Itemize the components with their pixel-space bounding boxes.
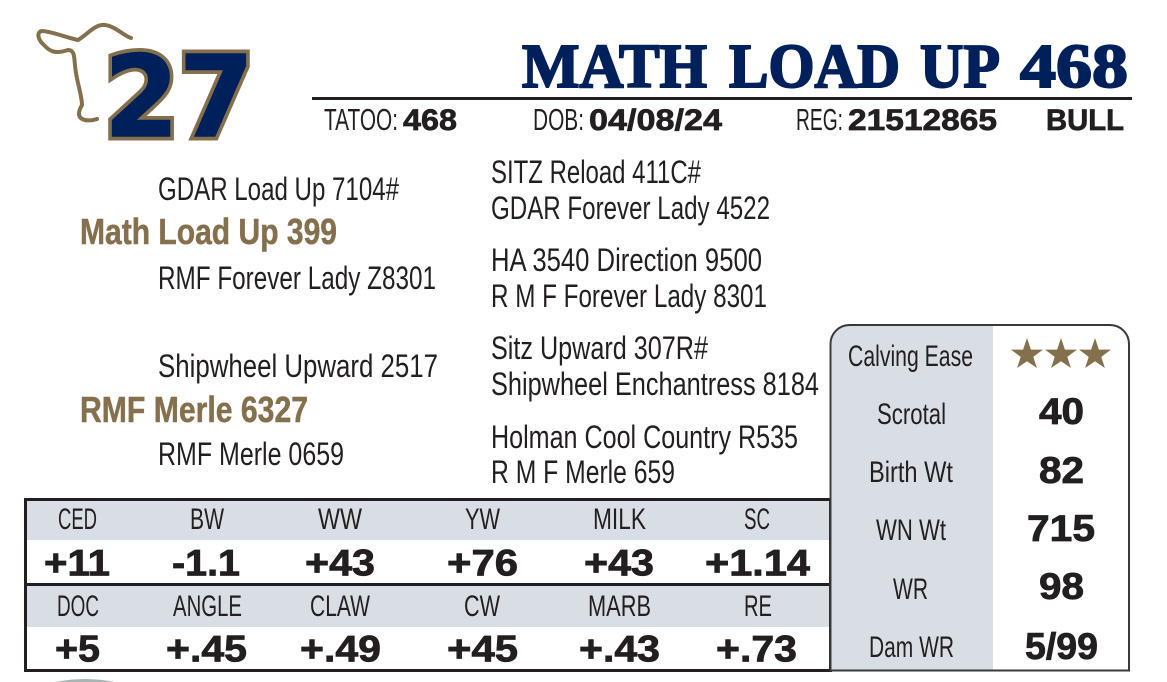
stat labels: Scrotal	[877, 398, 946, 431]
animal id row: DOB:	[533, 102, 584, 137]
stat labels: Calving Ease	[848, 340, 973, 373]
animal id row: BULL	[1046, 104, 1124, 137]
title: LOAD	[729, 33, 900, 101]
pedigree: sire side: HA 3540 Direction 9500	[491, 242, 762, 278]
stat labels: Dam WR	[869, 631, 954, 664]
EPD row 2 labels	[57, 590, 772, 623]
stat values	[1025, 391, 1098, 667]
animal id row: TATOO:	[324, 102, 398, 137]
stat values: 82	[1039, 450, 1084, 491]
EPD row 2 labels: MARB	[588, 590, 651, 623]
EPD row 1 labels: BW	[190, 503, 224, 536]
animal id row: 04/08/24	[589, 104, 722, 137]
EPD row 2 values	[55, 628, 797, 670]
EPD row 2 values: +.73	[716, 628, 797, 670]
EPD row 1 labels	[58, 503, 770, 536]
EPD row 1 labels: WW	[318, 503, 363, 536]
stat labels: WR	[893, 573, 928, 606]
stat values: 40	[1039, 391, 1084, 432]
EPD row 2 labels: RE	[744, 590, 772, 623]
EPD row 2 labels: ANGLE	[173, 590, 242, 623]
EPD row 2 values: +.49	[300, 628, 381, 670]
EPD row 1 values: +76	[447, 542, 518, 584]
pedigree: dam side	[80, 330, 819, 490]
EPD row 1 values	[44, 542, 810, 584]
pedigree: dam side: Holman Cool Country R535	[491, 419, 798, 455]
pedigree: sire side: RMF Forever Lady Z8301	[158, 260, 436, 296]
title: UP	[920, 33, 1000, 101]
pedigree: dam side: Shipwheel Enchantress 8184	[491, 366, 819, 402]
EPD row 1 labels: SC	[744, 503, 770, 536]
pedigree: sire side: Math Load Up 399	[80, 211, 337, 252]
pedigree: dam side: Shipwheel Upward 2517	[158, 348, 438, 384]
pedigree: sire side: R M F Forever Lady 8301	[491, 278, 767, 314]
header rule	[312, 97, 1132, 100]
EPD row 1 labels: MILK	[593, 503, 646, 536]
pedigree: dam side: RMF Merle 0659	[158, 436, 344, 472]
animal id row: 21512865	[848, 104, 997, 137]
stat labels: WN Wt	[876, 514, 946, 547]
animal id row: 468	[403, 104, 457, 137]
cropped graphic at bottom edge	[55, 679, 115, 682]
EPD row 1 values: +43	[305, 542, 375, 584]
EPD row 2 values: +.45	[166, 628, 247, 670]
pedigree: dam side: Sitz Upward 307R#	[491, 330, 708, 366]
EPD row 1 values: +11	[44, 542, 110, 584]
panel: performance stats	[830, 325, 1129, 671]
EPD row 2 labels: CW	[464, 590, 500, 623]
title: MATH	[522, 33, 707, 101]
stat values: 715	[1027, 508, 1095, 549]
EPD row 2 values: +.43	[579, 628, 660, 670]
animal id row	[324, 102, 1124, 137]
animal id row: REG:	[796, 102, 843, 137]
EPD row 1 labels: YW	[465, 503, 500, 536]
pedigree: dam side: R M F Merle 659	[491, 454, 675, 490]
EPD table	[25, 500, 830, 670]
EPD row 1 values: +1.14	[705, 542, 810, 584]
pedigree: sire side: GDAR Forever Lady 4522	[491, 190, 770, 226]
title	[522, 33, 1128, 101]
stat labels: Birth Wt	[869, 456, 954, 489]
pedigree: sire side: GDAR Load Up 7104#	[158, 171, 399, 207]
title: 468	[1020, 33, 1128, 101]
EPD row 2 labels: CLAW	[310, 590, 370, 623]
icon: three calving ease stars	[1011, 338, 1111, 368]
icon: cow head outline	[38, 25, 131, 120]
EPD row 2 labels: DOC	[57, 590, 99, 623]
pedigree: dam side: RMF Merle 6327	[80, 389, 308, 430]
EPD row 1 labels: CED	[58, 503, 97, 536]
stat values: 98	[1039, 566, 1084, 607]
pedigree: sire side	[80, 154, 770, 314]
EPD row 1 values: -1.1	[172, 542, 240, 584]
stat labels	[848, 340, 973, 664]
EPD row 2 values: +5	[55, 628, 100, 670]
lot number 27: 27	[104, 33, 254, 163]
stat values: 5/99	[1025, 626, 1098, 667]
EPD row 1 values: +43	[584, 542, 654, 584]
lot number 27: 27	[104, 33, 254, 163]
pedigree: sire side: SITZ Reload 411C#	[491, 154, 701, 190]
EPD row 2 values: +45	[447, 628, 518, 670]
